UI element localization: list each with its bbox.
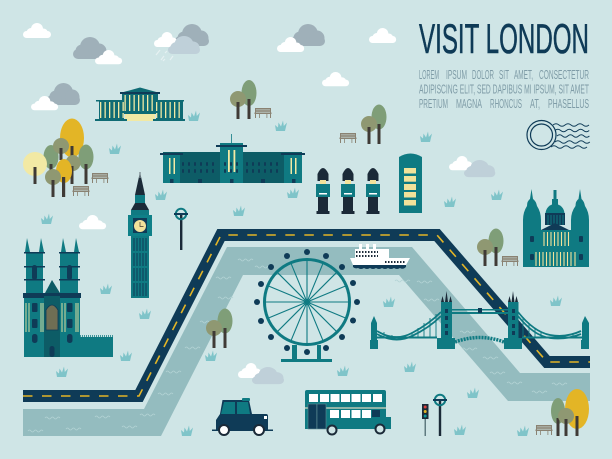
icon: bus stop lower bbox=[433, 395, 447, 436]
body text: MAGNA bbox=[456, 97, 482, 111]
grass tufts bbox=[41, 110, 562, 436]
clouds bbox=[23, 23, 495, 384]
landmark: national gallery bbox=[95, 88, 185, 121]
body text bbox=[419, 68, 589, 111]
trees: riverside bbox=[206, 308, 232, 348]
trees and bench: centre bbox=[340, 104, 386, 144]
taxi bbox=[212, 398, 273, 435]
body text: LOREM bbox=[419, 68, 439, 82]
landmark: westminster abbey bbox=[23, 238, 113, 357]
body text: AT, bbox=[530, 97, 540, 111]
river bbox=[23, 247, 590, 436]
trees and bench: near cathedral bbox=[477, 228, 518, 266]
landmark: st paul's cathedral bbox=[523, 189, 589, 267]
landmark: guards bbox=[316, 168, 380, 214]
body text: PRETIUM bbox=[419, 97, 448, 111]
trees and bench: bottom right bbox=[536, 389, 589, 436]
body text: DOLOR bbox=[472, 68, 494, 82]
body text: SIT bbox=[499, 68, 509, 82]
icon: bus stop upper bbox=[174, 209, 188, 250]
landmark: buckingham palace bbox=[160, 134, 305, 183]
body text: RHONCUS bbox=[490, 97, 522, 111]
landmark: london eye bbox=[254, 249, 360, 362]
icon: postmark stamp bbox=[527, 120, 590, 150]
landmark: big ben bbox=[128, 172, 152, 298]
landmark: phone box bbox=[399, 154, 422, 213]
double decker bus bbox=[305, 390, 391, 434]
body text: IPSUM bbox=[446, 68, 467, 82]
road bbox=[23, 235, 590, 396]
trees and bench: gallery bbox=[230, 80, 272, 119]
trees and benches: left grove bbox=[23, 118, 108, 197]
traffic light bbox=[422, 404, 428, 436]
landmark: tower bridge bbox=[370, 291, 589, 349]
boat bbox=[350, 244, 410, 269]
body text: AMET, bbox=[514, 68, 533, 82]
icon: rain bbox=[156, 50, 173, 61]
